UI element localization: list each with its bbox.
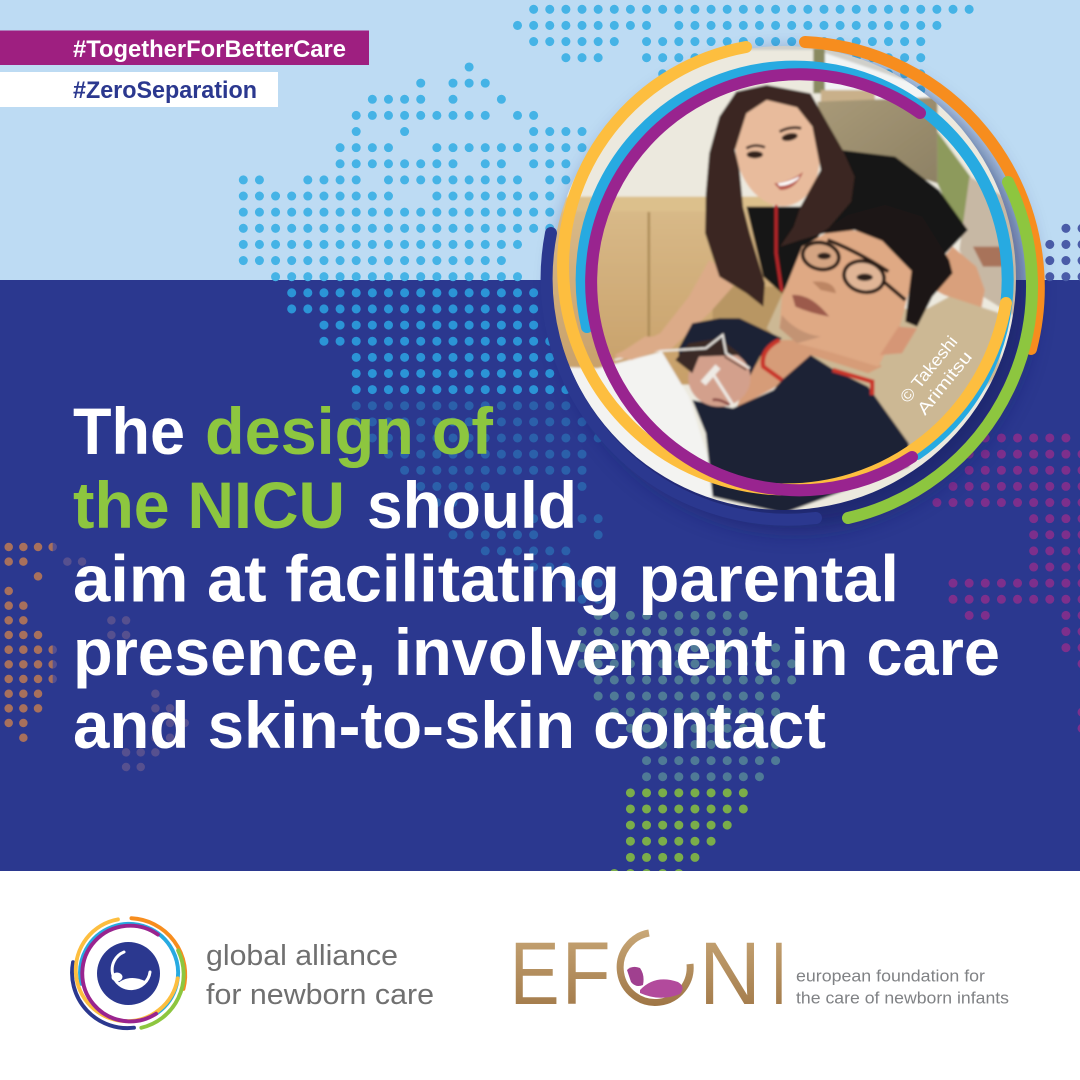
EFCNI letters: N — [699, 923, 761, 1023]
logo text — [206, 940, 434, 1011]
panel: navy main background — [0, 280, 1080, 871]
man's neck and chest — [736, 340, 882, 408]
EFCNI strapline: european foundation for — [796, 968, 986, 986]
map dots: top row Eurasia — [518, 9, 969, 90]
logo text: global alliance — [206, 940, 398, 972]
woman's hand on baby — [616, 336, 660, 360]
woman's arms — [936, 246, 986, 308]
coloured rings — [547, 42, 1039, 520]
woman's face — [734, 98, 821, 208]
man's navy shirt — [692, 355, 909, 513]
headline: should — [367, 468, 577, 542]
map dots: bright blue on navy — [292, 293, 566, 390]
hashtag bar: ZeroSeparation: #ZeroSeparation — [73, 77, 257, 104]
headline: aim at facilitating parental — [73, 542, 899, 616]
EFCNI baby icon — [627, 967, 683, 998]
logo: EFCNI — [510, 923, 1009, 1023]
headline: and skin-to-skin contact — [73, 688, 826, 762]
hashtag bar: TogetherForBetterCare: #TogetherForBetterCare — [73, 36, 346, 63]
EFCNI strapline — [796, 968, 1009, 1008]
woman's eyes, brows and smile — [747, 151, 763, 158]
map dots: North America on light blue — [243, 67, 582, 277]
panel: white footer — [0, 871, 1080, 1080]
headline: design of — [205, 394, 494, 468]
baby's tubes and tape — [615, 335, 750, 405]
headline: the NICU — [73, 468, 345, 542]
logo icon: rings and disc — [72, 918, 185, 1028]
man's glasses — [800, 239, 905, 300]
lanyard — [776, 205, 782, 292]
map dots: right edge dark blue — [1050, 228, 1080, 277]
man's eyes, nose and mouth — [817, 253, 831, 259]
photo: parents with newborn, skin-to-skin — [552, 46, 1016, 510]
panel: light blue top background — [0, 0, 1080, 280]
logo: global alliance for newborn care — [72, 918, 434, 1028]
map dots: left orange — [9, 547, 53, 738]
headline — [73, 394, 1000, 762]
EFCNI strapline: the care of newborn infants — [796, 990, 1009, 1008]
woman's hair — [705, 85, 855, 307]
EFCNI letters — [510, 923, 787, 1023]
map dots: South America green — [614, 793, 743, 873]
hashtag bar: ZeroSeparation — [0, 72, 278, 107]
woman's top — [746, 150, 968, 293]
circular photo with coloured rings — [530, 20, 1060, 540]
photo credit: Arimitsu — [913, 347, 976, 419]
map dots: South America grey blue — [582, 615, 792, 777]
photo drop shadow — [559, 56, 1031, 528]
man's hair — [822, 224, 954, 328]
map dots: dim blue on navy — [356, 406, 598, 599]
map dots: Australasia purple — [937, 438, 1080, 728]
baby's white towel — [570, 350, 714, 498]
headline: The — [73, 394, 185, 468]
EFCNI crescent C — [620, 933, 690, 1002]
man's face — [780, 228, 914, 367]
EFCNI letters: I — [771, 923, 787, 1023]
photo credit: © Takeshi — [896, 332, 961, 407]
hashtag bar: TogetherForBetterCare — [0, 30, 369, 65]
headline: presence, involvement in care — [73, 615, 1000, 689]
photo credit — [896, 332, 976, 419]
baby's head — [688, 350, 750, 407]
map dots: left dim — [53, 547, 185, 767]
EFCNI letters: F — [562, 923, 611, 1023]
dotted world map — [9, 9, 1080, 873]
logo text: for newborn care — [206, 979, 434, 1011]
red strap — [763, 340, 872, 395]
pillow — [766, 295, 1001, 446]
EFCNI letters: E — [510, 923, 560, 1023]
